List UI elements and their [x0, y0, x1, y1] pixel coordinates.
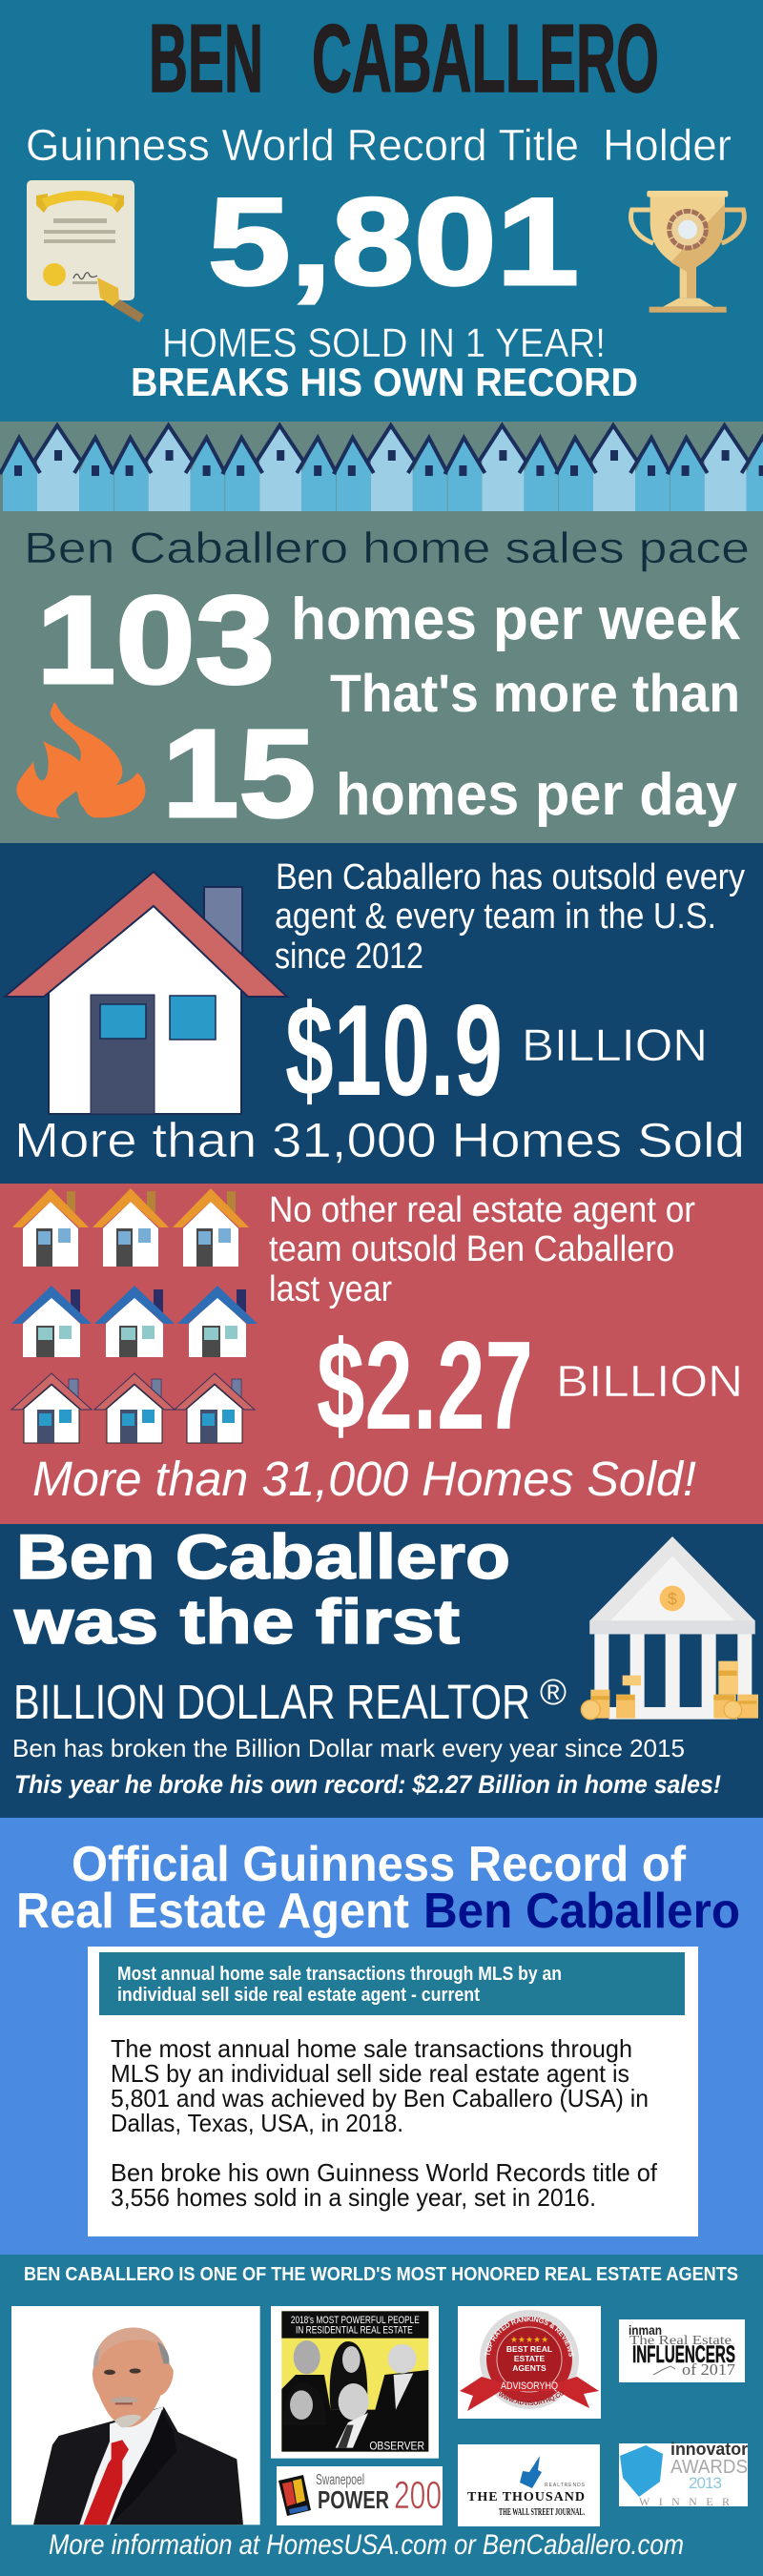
badge: innovator awards: innovator [670, 2440, 748, 2459]
homes sold: More than 31,000 Homes Sold [14, 1113, 745, 1167]
big number: $10.9 [285, 978, 503, 1123]
badge: the thousand [458, 2444, 600, 2526]
record note: BREAKS HIS OWN RECORD [131, 360, 638, 404]
badge: the thousand: REALTRENDS [545, 2483, 586, 2488]
subtitle: Guinness World Record Title [26, 120, 579, 170]
section heading: Ben Caballero home sales pace [24, 524, 750, 572]
badge: observer [271, 2306, 439, 2459]
card header [99, 1952, 685, 2015]
homes sold: More than 31,000 Homes Sold! [32, 1452, 696, 1506]
icon: trophy [631, 191, 744, 313]
card header: individual sell side real estate agent - current [117, 1985, 480, 2006]
panel: outsold every agent [0, 843, 763, 1184]
heading: was the first [13, 1586, 460, 1657]
description: last year [269, 1269, 392, 1309]
big number: $2.27 [317, 1315, 533, 1455]
description [275, 857, 745, 977]
record text: 5,801 and was achieved by Ben Caballero (USA) in [111, 2084, 649, 2112]
label: homes per day: homes per day [336, 762, 737, 828]
record text: Ben broke his own Guinness World Records title of [111, 2158, 658, 2187]
badge: power 200 [277, 2466, 443, 2525]
badge: the thousand: THE THOUSAND [467, 2490, 585, 2504]
title: BEN [149, 6, 263, 113]
heading line 1: Official Guinness Record of [72, 1837, 687, 1892]
card header: Most annual home sale transactions through MLS by an [117, 1964, 562, 1985]
badge: advisoryhq: ADVISORYHQ [501, 2380, 558, 2392]
icon: house [5, 872, 287, 1114]
badge: inman influencers: inman [629, 2322, 662, 2338]
description: agent & every team in the U.S. [275, 896, 716, 937]
record text: 3,556 homes sold in a single year, set in 2016. [111, 2183, 596, 2212]
record text: Dallas, Texas, USA, in 2018. [111, 2109, 403, 2137]
badge: power 200: 200 [394, 2473, 442, 2517]
record text: The most annual home sale transactions through [111, 2034, 632, 2063]
badge: innovator awards [619, 2440, 748, 2508]
number: per week: 103 [36, 569, 275, 710]
record text: MLS by an individual sell side real estate agent is [111, 2059, 629, 2088]
badge: inman influencers: of 2017 [682, 2360, 736, 2379]
badge: advisoryhq: ★★★★★ [510, 2335, 548, 2344]
subtitle: Holder [603, 120, 732, 170]
panel: record header [0, 0, 763, 422]
badge: observer: IN RESIDENTIAL REAL ESTATE [296, 2325, 413, 2337]
badge: inman influencers: The Real Estate [629, 2334, 732, 2348]
badge: power 200: POWER [318, 2485, 389, 2514]
unit: BILLION [522, 1020, 708, 1070]
badge: inman influencers [619, 2319, 745, 2382]
record card [88, 1947, 698, 2236]
record text [111, 2034, 658, 2212]
icon: bank with coins: $ [668, 1589, 677, 1608]
panel: billion dollar realtor [0, 1521, 763, 1818]
heading line 2: Real Estate Agent [16, 1884, 409, 1939]
note: Ben has broken the Billion Dollar mark every year since 2015 [12, 1734, 685, 1762]
row of houses [0, 425, 763, 511]
portrait [11, 2306, 260, 2524]
title [149, 6, 659, 113]
description: team outsold Ben Caballero [269, 1229, 674, 1269]
panel: no other agent [0, 1184, 763, 1524]
icon: flame [16, 702, 146, 818]
heading [13, 1521, 510, 1657]
subheading: BILLION DOLLAR REALTOR [13, 1675, 530, 1729]
icon: certificate [27, 180, 144, 322]
icon grid: houses [11, 1188, 258, 1443]
label: that's more than: That's more than [330, 663, 740, 723]
label: homes per week: homes per week [291, 587, 741, 652]
badge: advisoryhq: BEST REAL [506, 2344, 552, 2354]
unit: BILLION [556, 1356, 743, 1406]
heading name: Ben Caballero [423, 1884, 740, 1939]
badge: advisoryhq [458, 2306, 601, 2419]
icon: bank with coins [581, 1536, 758, 1720]
badge: advisoryhq: TOP RATED RANKINGS & REVIEWS [485, 2316, 574, 2357]
badge: advisoryhq: ESTATE [514, 2354, 545, 2363]
description: No other real estate agent or [269, 1190, 695, 1230]
description [269, 1190, 695, 1309]
big number: 5,801 [208, 172, 579, 311]
heading: Ben Caballero [16, 1521, 510, 1592]
statement: HOMES SOLD IN 1 YEAR! [162, 320, 606, 366]
badge: observer: OBSERVER [369, 2439, 424, 2452]
panel: official guinness record [0, 1818, 763, 2255]
registered mark: ® [540, 1673, 567, 1713]
record note: This year he broke his own record: $2.27 Billion in home sales! [14, 1770, 721, 1799]
badge: advisoryhq: WWW.ADVISORYHQ.COM [499, 2390, 565, 2405]
badge: advisoryhq: AGENTS [512, 2363, 546, 2373]
badge: innovator awards: AWARDS [670, 2457, 748, 2478]
badge: power 200: Swanepoel [316, 2472, 364, 2488]
badge: innovator awards: 2013 [689, 2474, 722, 2492]
badge: the thousand: THE WALL STREET JOURNAL. [499, 2506, 585, 2518]
description: since 2012 [275, 937, 423, 977]
number: per day: 15 [162, 703, 316, 843]
panel: home sales pace [0, 422, 763, 843]
badge: observer: 2018's MOST POWERFUL PEOPLE [291, 2315, 420, 2326]
badge: innovator awards: WINNER [639, 2495, 730, 2508]
